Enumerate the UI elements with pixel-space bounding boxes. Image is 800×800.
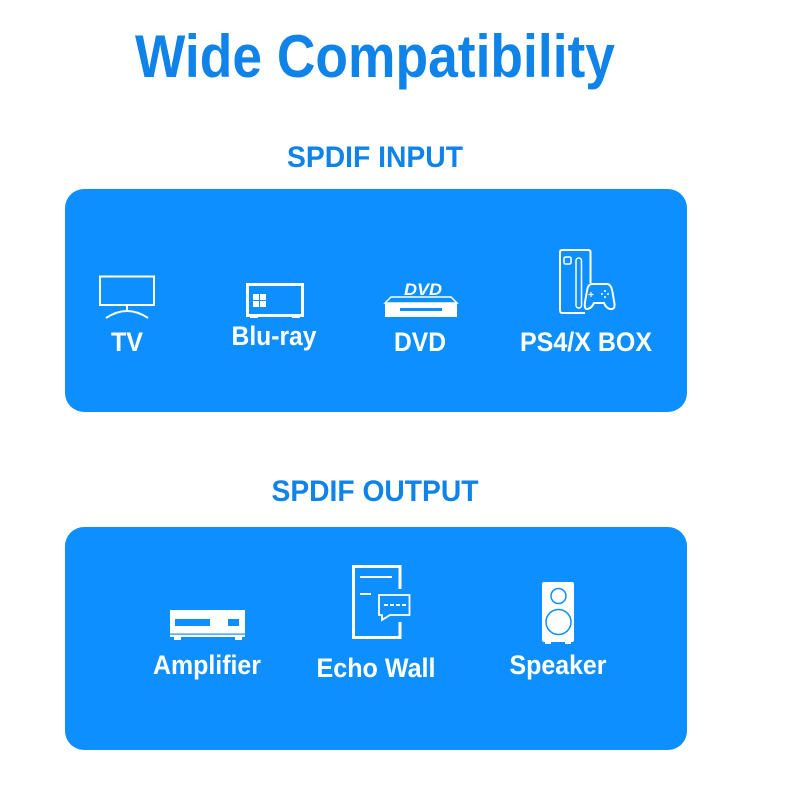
label: Blu-ray: Blu-ray — [232, 321, 316, 351]
label: Amplifier: Amplifier — [153, 650, 261, 680]
icon: DVD player — [385, 280, 457, 317]
panel: SPDIF output — [65, 527, 687, 750]
label: Echo Wall: Echo Wall — [316, 653, 436, 683]
label: TV: TV — [111, 327, 143, 357]
icon: TV — [100, 276, 154, 318]
title: Wide Compatibility — [135, 23, 616, 90]
panel: SPDIF input — [65, 189, 687, 412]
icon: DVD player: DVD — [404, 280, 442, 299]
icon: echo wall — [354, 566, 410, 638]
icon: Blu-ray player — [248, 284, 302, 318]
label: DVD: DVD — [394, 327, 446, 357]
label: PS4/X BOX: PS4/X BOX — [520, 327, 652, 357]
icon: amplifier — [170, 610, 245, 640]
heading: SPDIF input: SPDIF INPUT — [287, 141, 463, 174]
label: Speaker: Speaker — [510, 650, 607, 680]
icon: game console with controller — [560, 250, 615, 313]
heading: SPDIF output: SPDIF OUTPUT — [272, 475, 478, 508]
icon: speaker — [542, 582, 574, 644]
